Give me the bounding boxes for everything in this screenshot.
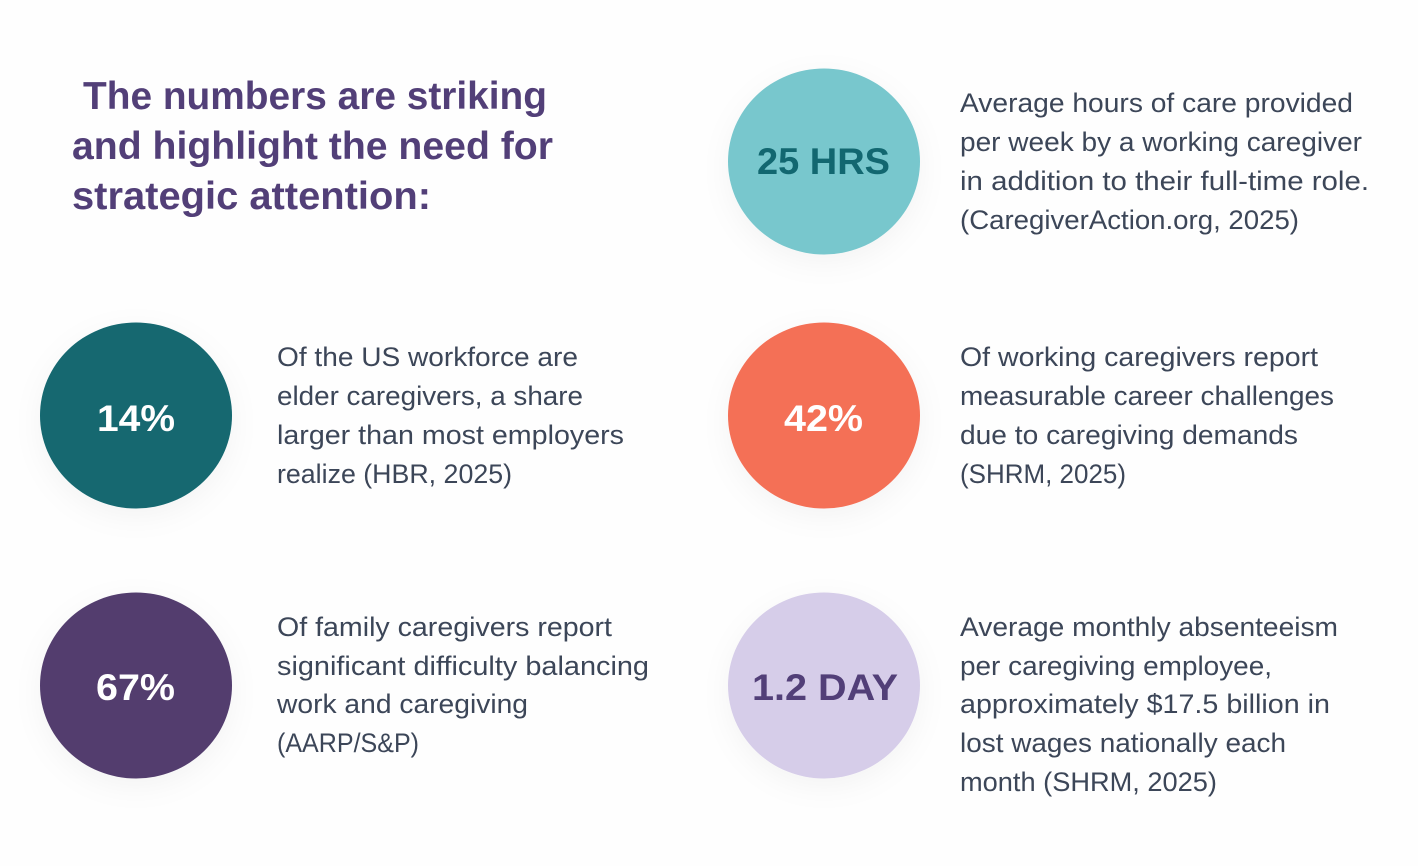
circle: 42% [728, 322, 920, 508]
description: workforce share: elder caregivers, a share [277, 381, 583, 411]
description: career challenges: Of working caregivers report [960, 342, 1319, 372]
circle: 1.2 DAY [728, 592, 920, 778]
description: balancing difficulty [276, 612, 649, 758]
description: career challenges [960, 342, 1334, 489]
description: absenteeism cost: month (SHRM, 2025) [960, 767, 1217, 797]
value: 14%: 14% [97, 398, 175, 439]
panel: 42% stat [728, 322, 1334, 508]
description: career challenges: (SHRM, 2025) [960, 459, 1126, 489]
value: 67%: 67% [96, 667, 175, 708]
description: workforce share [277, 342, 624, 489]
value: 42%: 42% [784, 398, 863, 439]
description: absenteeism cost [960, 612, 1338, 797]
description: weekly care hours: Average hours of care provided [960, 88, 1353, 118]
description: workforce share: larger than most employers [277, 420, 624, 450]
description: absenteeism cost: Average monthly absenteeism [960, 612, 1338, 642]
title: and highlight the need for [72, 125, 553, 168]
description: weekly care hours [960, 88, 1369, 235]
description: career challenges: measurable career challenges [960, 381, 1334, 411]
circle: 14% [40, 322, 232, 508]
title: strategic attention: [72, 175, 431, 218]
description: absenteeism cost: lost wages nationally each [960, 728, 1286, 758]
description: workforce share: realize (HBR, 2025) [277, 459, 512, 489]
panel: 25 HRS stat [728, 68, 1369, 254]
description: balancing difficulty: work and caregiving [276, 689, 528, 719]
description: balancing difficulty: Of family caregivers report [277, 612, 613, 642]
description: balancing difficulty: (AARP/S&P) [277, 728, 419, 758]
description: weekly care hours: (CaregiverAction.org, 2025) [960, 205, 1299, 235]
description: workforce share: Of the US workforce are [277, 342, 578, 372]
description: absenteeism cost: approximately $17.5 billion in [960, 689, 1330, 719]
title: The numbers are striking [83, 75, 547, 118]
value: 25 HRS: 25 HRS [757, 141, 890, 182]
value: 1.2 DAY: 1.2 DAY [752, 667, 898, 708]
description: weekly care hours: in addition to their full-time role. [960, 166, 1369, 196]
panel: 1.2 DAY stat [728, 592, 1338, 797]
panel: 14% stat [40, 322, 624, 508]
description: balancing difficulty: significant difficulty balancing [277, 651, 649, 681]
panel: 67% stat [40, 592, 649, 778]
description: weekly care hours: per week by a working caregiver [960, 127, 1362, 157]
description: career challenges: due to caregiving demands [960, 420, 1298, 450]
circle: 67% [40, 592, 232, 778]
title [72, 75, 553, 218]
circle: 25 HRS [728, 68, 920, 254]
description: absenteeism cost: per caregiving employee, [960, 651, 1272, 681]
